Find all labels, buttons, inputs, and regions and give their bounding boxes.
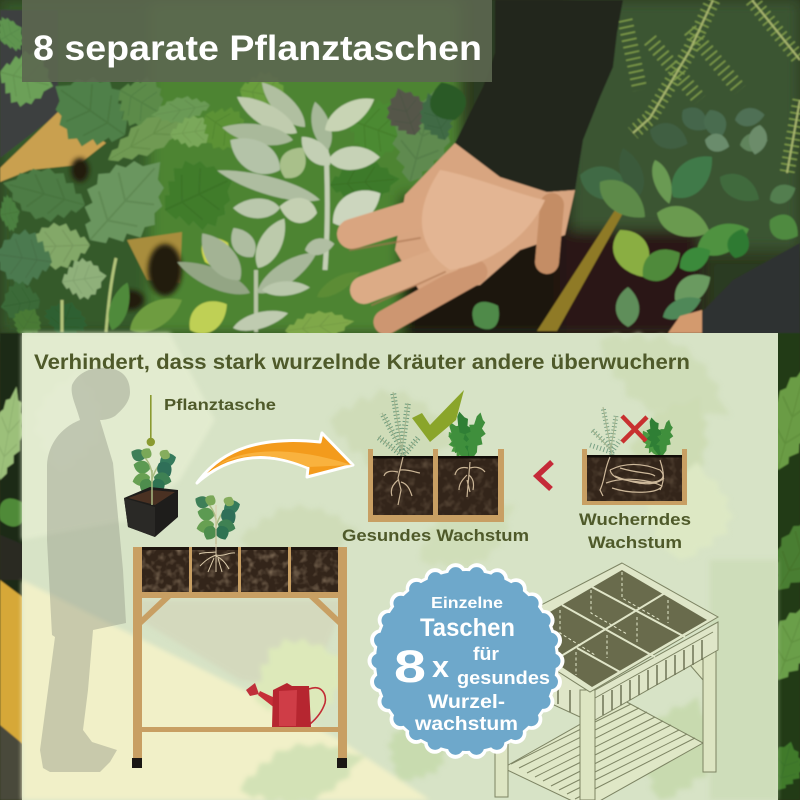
cross mark (622, 416, 647, 442)
label: healthy growth: Gesundes Wachstum (342, 526, 529, 545)
purple-green mint behind hand (378, 77, 471, 189)
lower shelf (503, 700, 703, 800)
bed front faces (493, 622, 718, 723)
photo ground tones (0, 0, 800, 335)
healthy bed frame (368, 449, 504, 522)
label: Pflanztasche (147, 395, 276, 446)
badge scalloped disc (373, 568, 559, 754)
right foliage (575, 101, 800, 327)
right margin plants (756, 333, 800, 800)
arrow (197, 433, 353, 483)
table roots (199, 505, 235, 572)
isometric raised bed drawing (493, 563, 718, 800)
soil patches (71, 120, 182, 310)
badge text: gesundes (457, 667, 550, 688)
plant in table (193, 493, 242, 544)
table legs and frame (133, 547, 347, 758)
rosemary small (590, 407, 620, 455)
arugula small (636, 416, 676, 462)
badge text: Einzelne (431, 595, 503, 612)
rear legs (495, 640, 716, 797)
tray compartments (512, 570, 707, 687)
badge text: wachstum (414, 713, 518, 735)
arugula (441, 410, 490, 467)
sage plant centre (173, 76, 388, 336)
title banner: 8 separate Pflanztaschen (33, 29, 482, 68)
rosemary in photo (625, 0, 800, 173)
badge: 8x individual pockets (373, 568, 559, 754)
second sleeve (702, 243, 800, 360)
icon: plant in black grow bag (124, 446, 178, 537)
bed top rim (493, 563, 718, 692)
person silhouette (40, 368, 130, 772)
hand (350, 143, 705, 333)
label: overgrown growth (579, 510, 691, 552)
front leg (580, 690, 595, 800)
check mark (412, 390, 464, 442)
left margin plants and wood (0, 333, 33, 800)
rosemary (378, 392, 418, 457)
title banner (22, 0, 492, 82)
small plant below hand (465, 294, 507, 336)
overgrown bed frame (582, 449, 687, 505)
panel: growth comparison (22, 307, 778, 800)
badge text (394, 595, 550, 735)
healthy roots (384, 457, 485, 505)
badge text: x (432, 649, 450, 684)
overgrown soil (587, 455, 682, 501)
sleeve (455, 0, 623, 192)
healthy growth bed (368, 390, 504, 522)
badge text: 8 (394, 641, 426, 692)
comparison sign (537, 462, 552, 489)
table feet (132, 758, 347, 768)
wooden bed frame in photo (0, 10, 623, 331)
badge text: für (473, 644, 499, 664)
tangled roots (600, 457, 664, 496)
panel background (22, 307, 778, 800)
raised bed table with plant (132, 493, 347, 768)
badge text: Taschen (420, 614, 515, 642)
healthy soil (373, 456, 498, 516)
label: overgrown growth: Wucherndes (579, 510, 691, 529)
strawberry leaves left (0, 11, 417, 346)
label: Pflanztasche: Pflanztasche (164, 397, 276, 414)
table soil compartments (142, 547, 338, 593)
overgrown growth bed (582, 407, 687, 505)
heading: Verhindert, dass stark wurzelnde Kräuter andere überwuchern (34, 351, 690, 374)
icon: watering can (246, 683, 325, 727)
badge text: Wurzel- (428, 691, 505, 713)
label: overgrown growth: Wachstum (588, 533, 682, 552)
